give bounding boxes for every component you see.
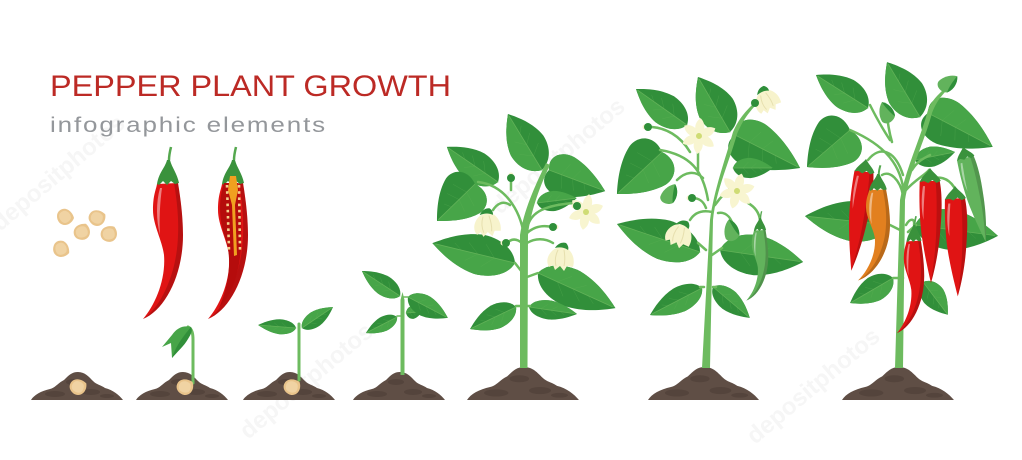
leaves: [790, 52, 1004, 322]
seed core: [227, 176, 240, 256]
flowers: [471, 172, 607, 271]
watermark: depositphotos: [487, 93, 631, 220]
stage 2: sprout: [136, 326, 228, 400]
whole red pepper: [143, 147, 183, 319]
pepper cavity: [219, 183, 241, 308]
stem: [652, 105, 760, 368]
stage 6: plant with green pepper: [599, 67, 811, 400]
stage 3: seedling: [243, 300, 337, 400]
red pepper left: [842, 158, 876, 272]
stage 4: young plant: [353, 263, 453, 400]
seeds: [51, 206, 120, 260]
title: PEPPER PLANT GROWTH: [50, 70, 451, 103]
green pepper: [954, 145, 996, 244]
flowers and buds: [642, 82, 784, 251]
leaves: [420, 104, 623, 340]
red pepper right: [944, 186, 970, 297]
watermark: depositphotos: [235, 318, 379, 445]
red pepper centre: [897, 216, 924, 333]
subtitle: infographic elements: [50, 114, 327, 137]
stage 1: seed in soil: [31, 372, 123, 400]
stage 5: flowering plant: [420, 104, 623, 400]
stage 7: fruiting plant: [790, 52, 1004, 400]
green pepper: [746, 211, 768, 301]
stem: [478, 163, 575, 368]
halved red pepper: [208, 147, 248, 319]
orange pepper: [858, 165, 890, 281]
red pepper middle: [919, 168, 943, 283]
watermark: [0, 93, 886, 450]
leaves: [599, 67, 811, 326]
buds: [875, 70, 962, 125]
watermark: depositphotos: [742, 323, 886, 450]
stem: [850, 90, 954, 368]
